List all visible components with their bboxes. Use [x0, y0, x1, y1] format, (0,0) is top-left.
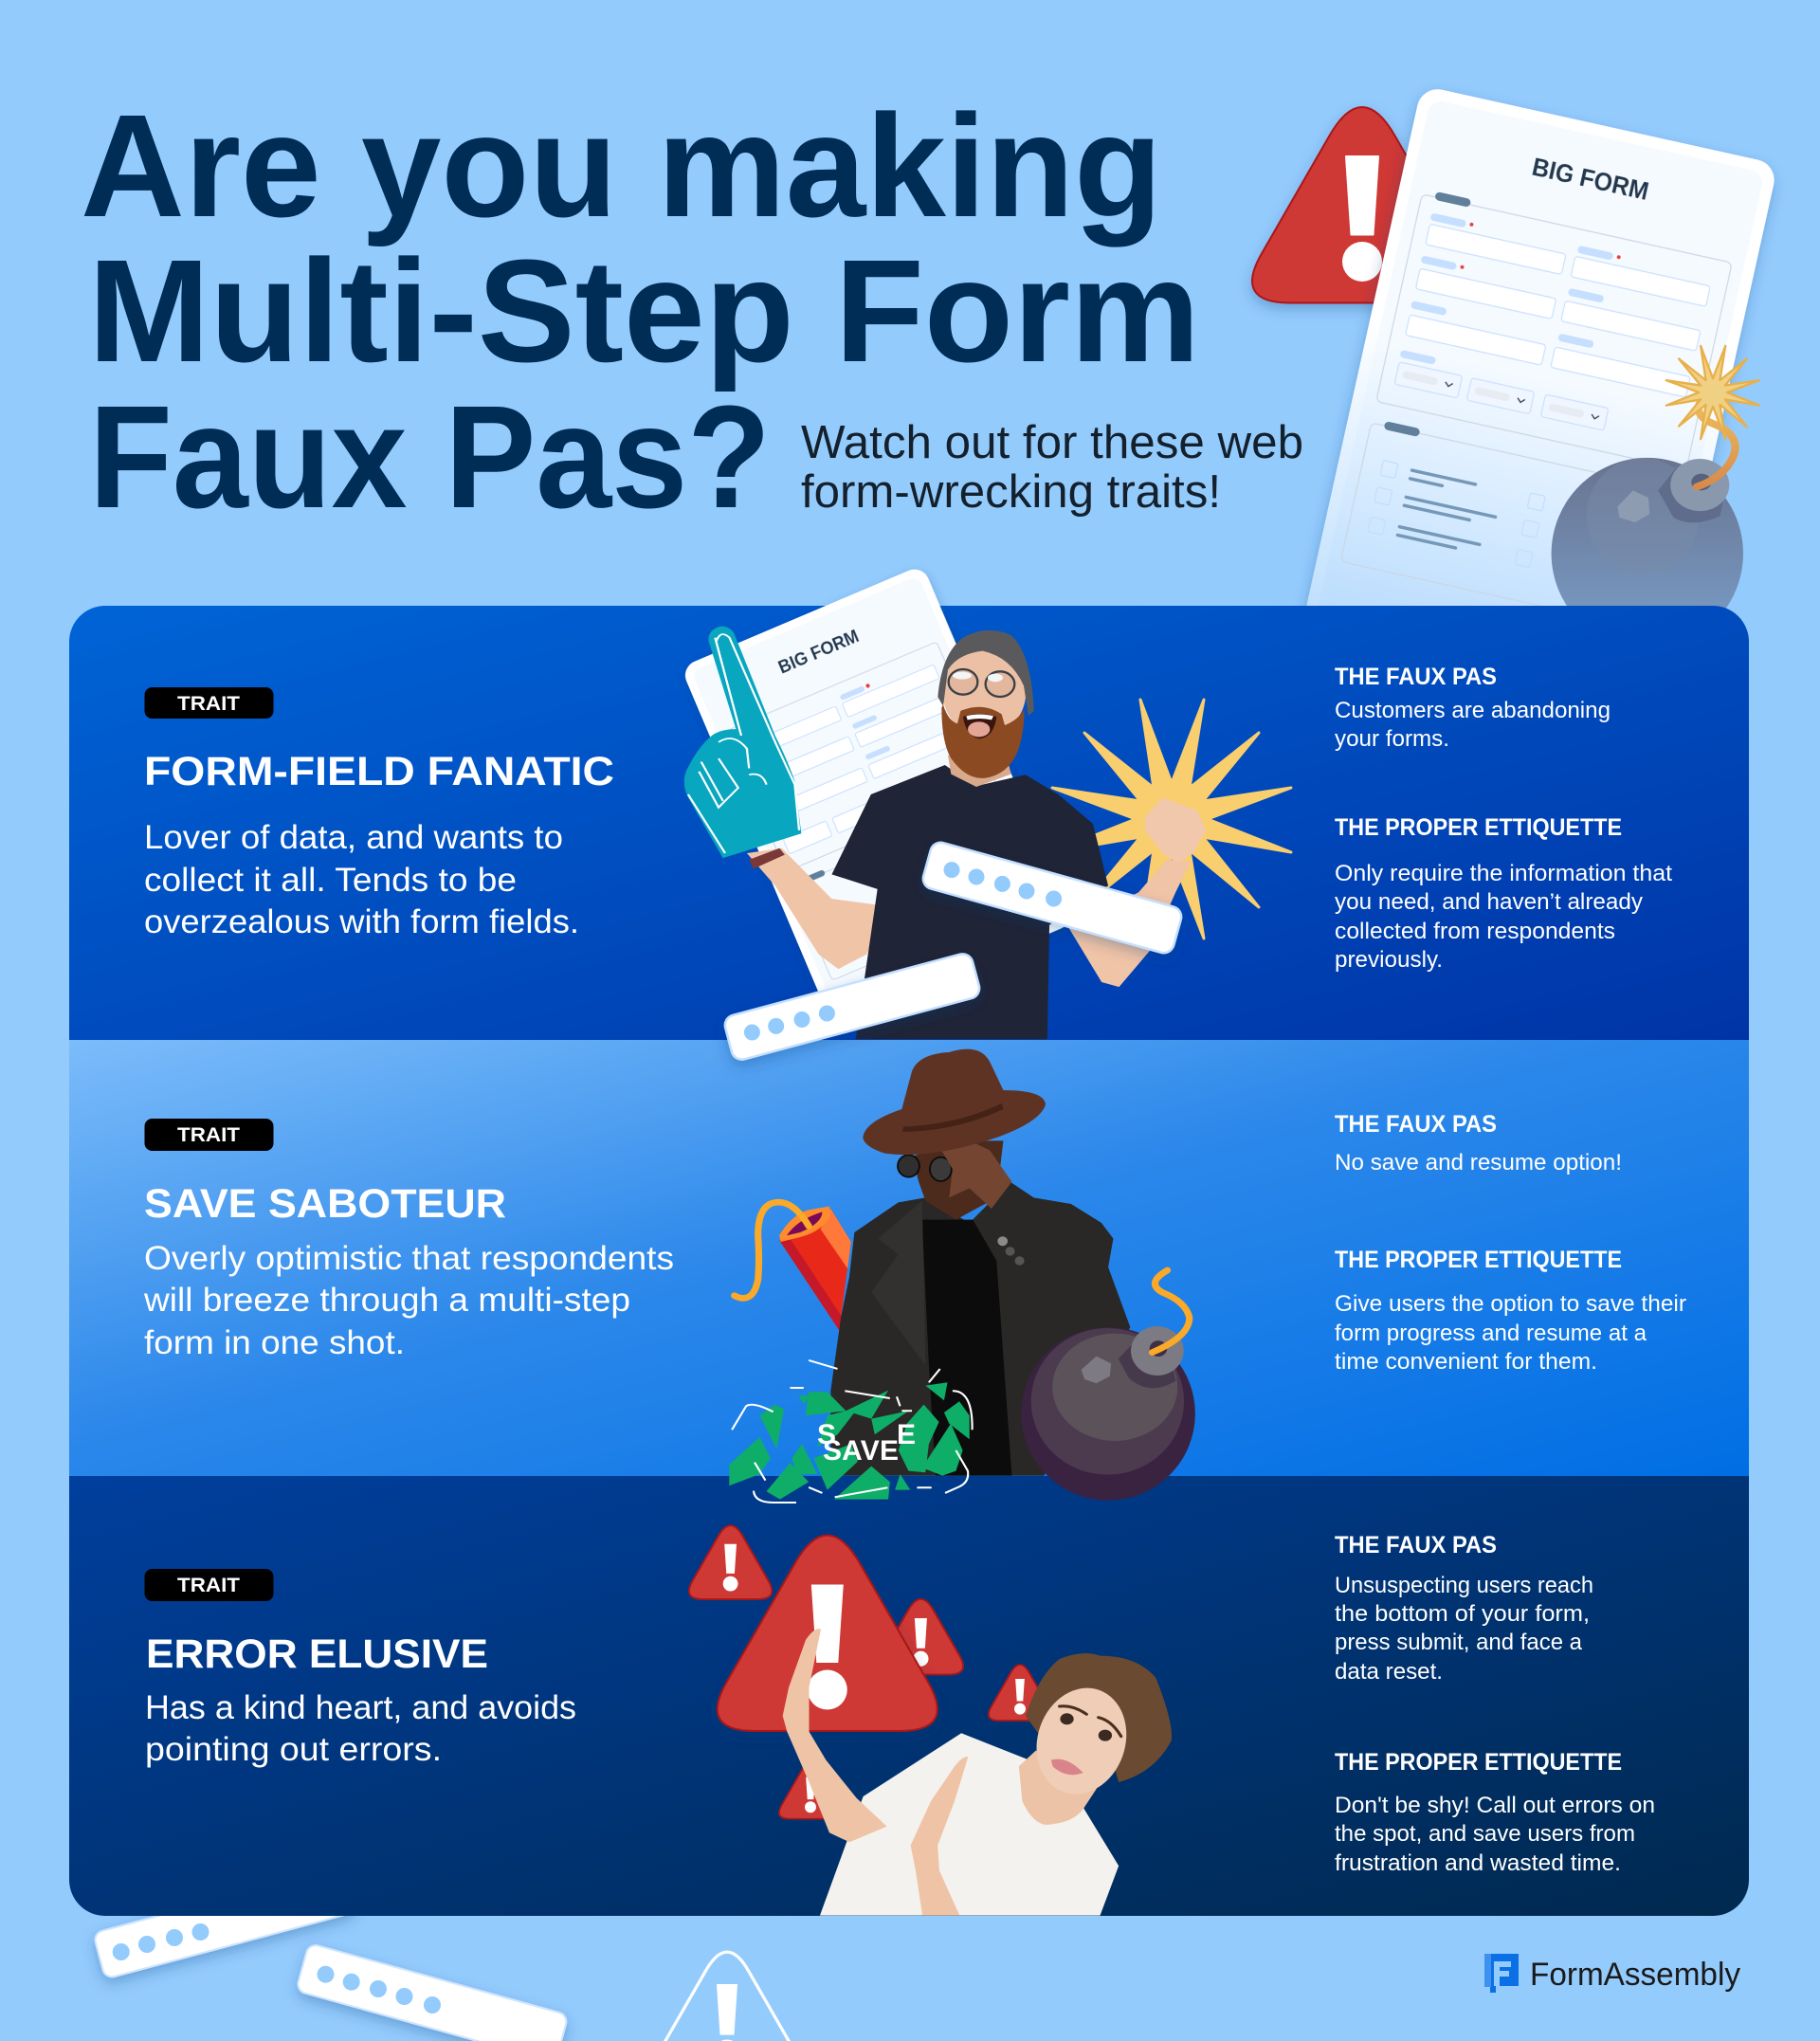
heading: error elusive: ERROR ELUSIVE [146, 1631, 488, 1677]
text block: etiquette 1: you need, and haven’t already [1335, 889, 1643, 915]
description: save saboteur: form in one shot. [144, 1324, 405, 1361]
input bar 1 [920, 840, 1184, 956]
trait pill 3 [144, 1569, 273, 1601]
illustration: broken save button: E [897, 1419, 916, 1450]
icon: warning triangle header [1252, 107, 1472, 303]
text block: etiquette 1 [1335, 814, 1672, 973]
text block: etiquette 2: THE PROPER ETTIQUETTE [1335, 1247, 1622, 1273]
text block: etiquette 2: time convenient for them. [1335, 1349, 1597, 1375]
trait pill 1: TRAIT [177, 693, 240, 715]
icon: small warning triangle 4 [779, 1763, 842, 1819]
icon: yellow burst [1052, 700, 1291, 938]
heading: save saboteur: SAVE SABOTEUR [144, 1181, 506, 1227]
text block: etiquette 3: frustration and wasted time. [1335, 1850, 1621, 1876]
title [81, 84, 1200, 538]
text block: faux pas 2: THE FAUX PAS [1335, 1111, 1497, 1138]
text block: faux pas 2 [1335, 1111, 1622, 1175]
description: form-field fanatic: collect it all. Tends to be [144, 862, 517, 899]
icon: big warning triangle [718, 1536, 937, 1731]
text block: faux pas 1 [1335, 664, 1611, 752]
text block: etiquette 2: form progress and resume at a [1335, 1321, 1647, 1346]
title: Multi-Step Form [88, 229, 1200, 392]
illustration: form behind fan [681, 565, 1075, 1026]
text block: etiquette 3: the spot, and save users from [1335, 1821, 1635, 1847]
illustration: broken save button [729, 1360, 973, 1503]
icon: bomb header [1552, 398, 1743, 649]
text block: faux pas 1: Customers are abandoning [1335, 698, 1611, 723]
description: save saboteur [143, 1240, 674, 1361]
text block: faux pas 3: THE FAUX PAS [1335, 1532, 1497, 1558]
subtitle: form-wrecking traits! [801, 466, 1221, 518]
icon: outline warning triangle bottom [656, 1952, 798, 2041]
text block: etiquette 3 [1335, 1749, 1655, 1876]
text block: faux pas 3: press submit, and face a [1335, 1630, 1583, 1655]
icon: bomb [1021, 1270, 1195, 1501]
icon: spark header [1666, 346, 1759, 439]
text block: etiquette 2: Give users the option to save their [1335, 1291, 1686, 1317]
text block: faux pas 3: Unsuspecting users reach [1335, 1573, 1593, 1598]
text block: faux pas 3 [1335, 1532, 1593, 1685]
text block: faux pas 3: the bottom of your form, [1335, 1601, 1590, 1627]
description: error elusive: Has a kind heart, and avoids [145, 1689, 576, 1726]
text block: etiquette 1: collected from respondents [1335, 919, 1615, 944]
icon: small warning triangle 3 [989, 1665, 1051, 1721]
input bar bottom left [93, 1866, 356, 1979]
text block: etiquette 3: Don't be shy! Call out errors on [1335, 1793, 1655, 1818]
illustration: big form header: BIG FORM [1530, 153, 1651, 206]
description: form-field fanatic [144, 819, 579, 940]
input bar bottom middle [296, 1943, 569, 2041]
figure: worried woman [783, 1629, 1172, 1916]
icon: small warning triangle 1 [689, 1525, 772, 1599]
input bar 2 [722, 952, 982, 1062]
text block: faux pas 3: data reset. [1335, 1659, 1443, 1685]
logo: FormAssembly: FormAssembly [1530, 1957, 1740, 1993]
heading: form-field fanatic: FORM-FIELD FANATIC [144, 749, 614, 794]
trait pill 3: TRAIT [177, 1575, 240, 1596]
illustration: form behind fan: BIG FORM [775, 626, 862, 679]
text block: faux pas 1: THE FAUX PAS [1335, 664, 1497, 690]
panel: error elusive [144, 1525, 1172, 1916]
text block: etiquette 3: THE PROPER ETTIQUETTE [1335, 1749, 1622, 1776]
title: Are you making [81, 84, 1162, 247]
text block: etiquette 2 [1335, 1247, 1686, 1375]
illustration: big form header [1278, 85, 1778, 812]
description: form-field fanatic: overzealous with form fields. [144, 903, 579, 940]
trait pill 2: TRAIT [177, 1124, 240, 1146]
text block: faux pas 2: No save and resume option! [1335, 1150, 1622, 1175]
title: Faux Pas? [89, 375, 771, 538]
trait pill 1 [144, 687, 273, 719]
subtitle: Watch out for these web [801, 417, 1303, 468]
figure: man in fedora with dynamite [735, 1049, 1130, 1476]
text block: etiquette 1: Only require the information that [1335, 861, 1672, 886]
description: save saboteur: will breeze through a multi-step [143, 1282, 630, 1319]
description: error elusive: pointing out errors. [145, 1731, 442, 1768]
illustration: broken save button: S [817, 1419, 836, 1450]
figure: excited man with foam finger [684, 627, 1206, 1039]
panel: save saboteur [143, 1049, 1195, 1503]
description: save saboteur: Overly optimistic that respondents [144, 1240, 674, 1277]
icon: small warning triangle 2 [879, 1599, 963, 1674]
trait pill 2 [144, 1119, 273, 1151]
description: error elusive [145, 1689, 576, 1768]
description: form-field fanatic: Lover of data, and wants to [144, 819, 563, 856]
subtitle [801, 417, 1303, 518]
text block: faux pas 1: your forms. [1335, 726, 1449, 752]
panel: form-field fanatic [144, 565, 1291, 1039]
panels background [69, 606, 1749, 1916]
text block: etiquette 1: THE PROPER ETTIQUETTE [1335, 814, 1622, 841]
illustration: broken save button: SAVE [823, 1435, 899, 1467]
text block: etiquette 1: previously. [1335, 947, 1443, 973]
